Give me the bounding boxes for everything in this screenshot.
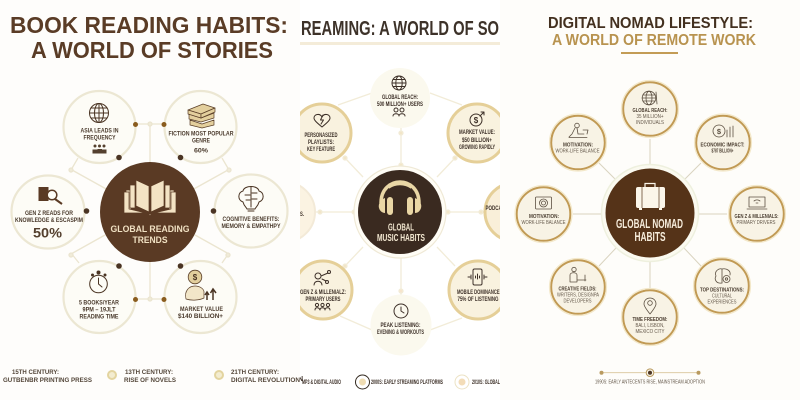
node: gen z and millennials: GEN Z & MILLENIALZ: [300,289,346,296]
node: market value: $50 BILLION+ [462,137,492,144]
node: asia leads: ASIA LEADS IN [80,128,118,134]
panel: digital nomad lifestyle [500,0,800,400]
node: motivation work life: WORK-LIFE BALANCE [556,148,600,154]
node: reading time: 5 BOOKS/YEAR [79,300,120,306]
central hub: global nomad habits: HABITS [634,229,666,244]
icon: stopwatch [90,271,107,293]
icon: brain gears [715,269,730,283]
icon: person with laptop [569,123,588,138]
node: market value: MARKET VALUE [180,307,223,313]
node: reading time: 9PM – 19JLT [82,308,116,314]
title: digital nomad: A WORLD OF REMOTE WORK [552,32,757,49]
icon: dollar growth [470,112,484,126]
central hub: global nomad habits: GLOBAL NOMAD [616,216,683,231]
icon: users [393,108,405,116]
node: mobile dominance [449,261,507,319]
node: motivation work life [550,114,606,171]
icon: camera [536,197,552,209]
title: book reading: A WORLD OF STORIES [31,37,273,63]
timeline: book history: 15TH CENTURY: [12,369,59,376]
icon: book stack [188,104,215,128]
node: personalized playlists: PERSONASIZED [304,132,338,139]
node: podcasts [485,183,543,241]
node: top destinations: TOP DESTINATIONS: [700,288,744,294]
node: global reach: GLOBAL REACH: [632,108,668,114]
node: fiction: FICTION MOST POPULAR [168,132,234,138]
node: motivation camera [515,186,572,242]
title: book reading: BOOK READING HABITS: [10,12,288,38]
node: time freedom: MEXICO CITY [636,329,665,335]
node: personalized playlists: PLAYLISTS: [308,139,334,146]
node: market value [448,104,506,162]
panel: music streaming [298,18,511,390]
node: top destinations: CULTURAL [712,294,732,300]
node: motivation camera: MOTIVATION: [529,214,559,220]
timeline: book history: DIGITAL REVOLUTION [231,377,300,384]
timeline: streaming history [298,375,500,389]
node: left faded [255,182,315,242]
node: time freedom [622,288,678,346]
node: time freedom: TIME FREEDOM: [632,317,668,323]
node: reading time [64,261,138,333]
node: market value: GROWING RAPIDLY [459,144,495,151]
icon: laptop [747,197,767,209]
central hub: global music habits [354,166,446,258]
node: gen z reads [12,176,89,248]
central hub: global music habits: GLOBAL [388,222,414,234]
node: gen z reads: 50% [33,224,63,240]
node: top destinations: EXPERIENCES [708,300,737,306]
node: gen z and millennials [294,261,352,319]
timeline: book history: 13TH CENTURY: [125,369,173,376]
node: motivation camera: WORK-LIFE BALANCE [522,220,566,226]
icon: globe [642,91,657,105]
icon: brain bulb [239,186,263,211]
node: global reach: 35 MILLION+ [636,114,664,120]
icon: clock [394,304,408,318]
node: gen z and millennials: PRIMARY USERS [306,296,341,303]
node: reading time: READING TIME [80,314,118,320]
icon: phone waveform [468,269,487,285]
node: global reach [370,68,430,128]
node: personalized playlists: KEY FEATURE [307,146,335,153]
node: market value: MARKET VALUE: [459,129,495,136]
node: global reach: INDIVIDUALS [636,120,664,126]
timeline: streaming history: 2010S: GLOBAL [472,380,500,386]
node: gen z reads: KNOWLEDGE & ESCASPIM [15,218,83,224]
icon: person with coin and arrows: $ [193,273,198,282]
node: economic impact [694,114,752,171]
node: market value: $ [474,116,479,125]
node: asia leads [64,91,138,163]
node: creative fields: WRITERS, DESIGNPA [557,292,599,298]
node: personalized playlists [293,104,351,162]
timeline: streaming history: MP3 & DIGITAL AUDIO [302,380,341,386]
node: left faded: S. [300,211,304,218]
node: mobile dominance: 75% OF LISTENING [458,296,498,303]
timeline: nomad history: 1990S: EARLY ANTECENTS RISE, MAINSTREAM ADOPTION [595,380,705,386]
central hub: global nomad habits [602,164,698,262]
central hub: global reading trends [100,162,200,262]
node: gen z drivers [728,186,786,242]
node: global reach: GLOBAL REACH: [382,94,418,101]
timeline: book history: RISE OF NOVELS [124,377,176,384]
icon: globe [90,104,108,122]
node: global reach: 500 MILLION+ USERS [377,101,423,108]
node: mobile dominance: MOBILE DOMINANCE: [457,289,501,296]
timeline: book history: GUTBENBR PRINTING PRESS [3,377,92,384]
timeline: book history [3,369,300,384]
node: global reach [622,80,678,138]
title: digital nomad: DIGITAL NOMAD LIFESTYLE: [548,15,753,32]
node: fiction: 60% [194,148,209,154]
node: top destinations [694,258,750,314]
node: peak listening: EVENING & WORKOUTS [377,329,424,336]
node: motivation work life: MOTIVATION: [563,142,593,148]
icon: suitcase [636,184,665,210]
node: podcasts: PODCASTS [486,205,511,212]
timeline: nomad history [595,369,705,386]
connector network [315,93,484,330]
icon: heart bolt [314,114,330,127]
node: market value: $140 BILLION+ [178,314,224,320]
icon: three users [315,303,330,310]
node: economic impact: $ [717,127,722,136]
panel: book reading habits [0,0,300,400]
node: cognitive benefits: COGNITIVE BENEFITS: [222,217,280,223]
connector network [573,139,727,288]
title: digital nomad [548,15,757,54]
node: time freedom: BALI, LISBON, [636,323,664,329]
node: fiction: GENRE [192,138,210,144]
connector network [69,122,231,301]
icon: globe [392,76,406,90]
central hub: global music habits: MUSIC HABITS [377,232,425,244]
timeline: book history: 21TH CENTURY: [231,369,279,376]
node: peak listening: PEAK LISTENING: [380,322,420,329]
node: economic impact: ECONOMIC IMPACT: [700,142,745,148]
timeline: streaming history: 2000S: EARLY STREAMING PLATFORMS [371,380,443,386]
icon: users network [314,270,330,285]
timeline: streaming history: N [298,376,303,383]
node: fiction [162,91,236,163]
icon: dollar and bars [713,125,733,137]
node: cognitive benefits [211,174,288,248]
node: creative fields: DEVELOPERS [564,298,592,304]
title: book reading [10,12,288,63]
node: market value [162,261,236,333]
node: economic impact: $787 BILLION+ [712,148,734,154]
node: cognitive benefits: MEMORY & EMPATHPY [222,224,280,230]
icon: book and magnifier [38,187,62,204]
node: peak listening [370,294,432,356]
icon: headphones [379,182,421,215]
icon: people [92,144,106,154]
node: asia leads: FREQUENCY [84,136,116,142]
central hub: global reading trends: GLOBAL READING [110,224,190,235]
node: gen z drivers: PRIMARY DRIVERS [736,220,776,226]
icon: location pin [644,298,656,314]
icon: open book [124,180,176,216]
icon: person writing [570,267,586,282]
node: gen z reads: GEN Z READS FOR [25,211,74,217]
node: creative fields: CREATIVE FIELDS: [558,286,597,292]
node: gen z drivers: GEN Z & MILLENIALS: [734,214,779,220]
node: creative fields [550,258,606,316]
central hub: global reading trends: TRENDS [132,235,168,246]
